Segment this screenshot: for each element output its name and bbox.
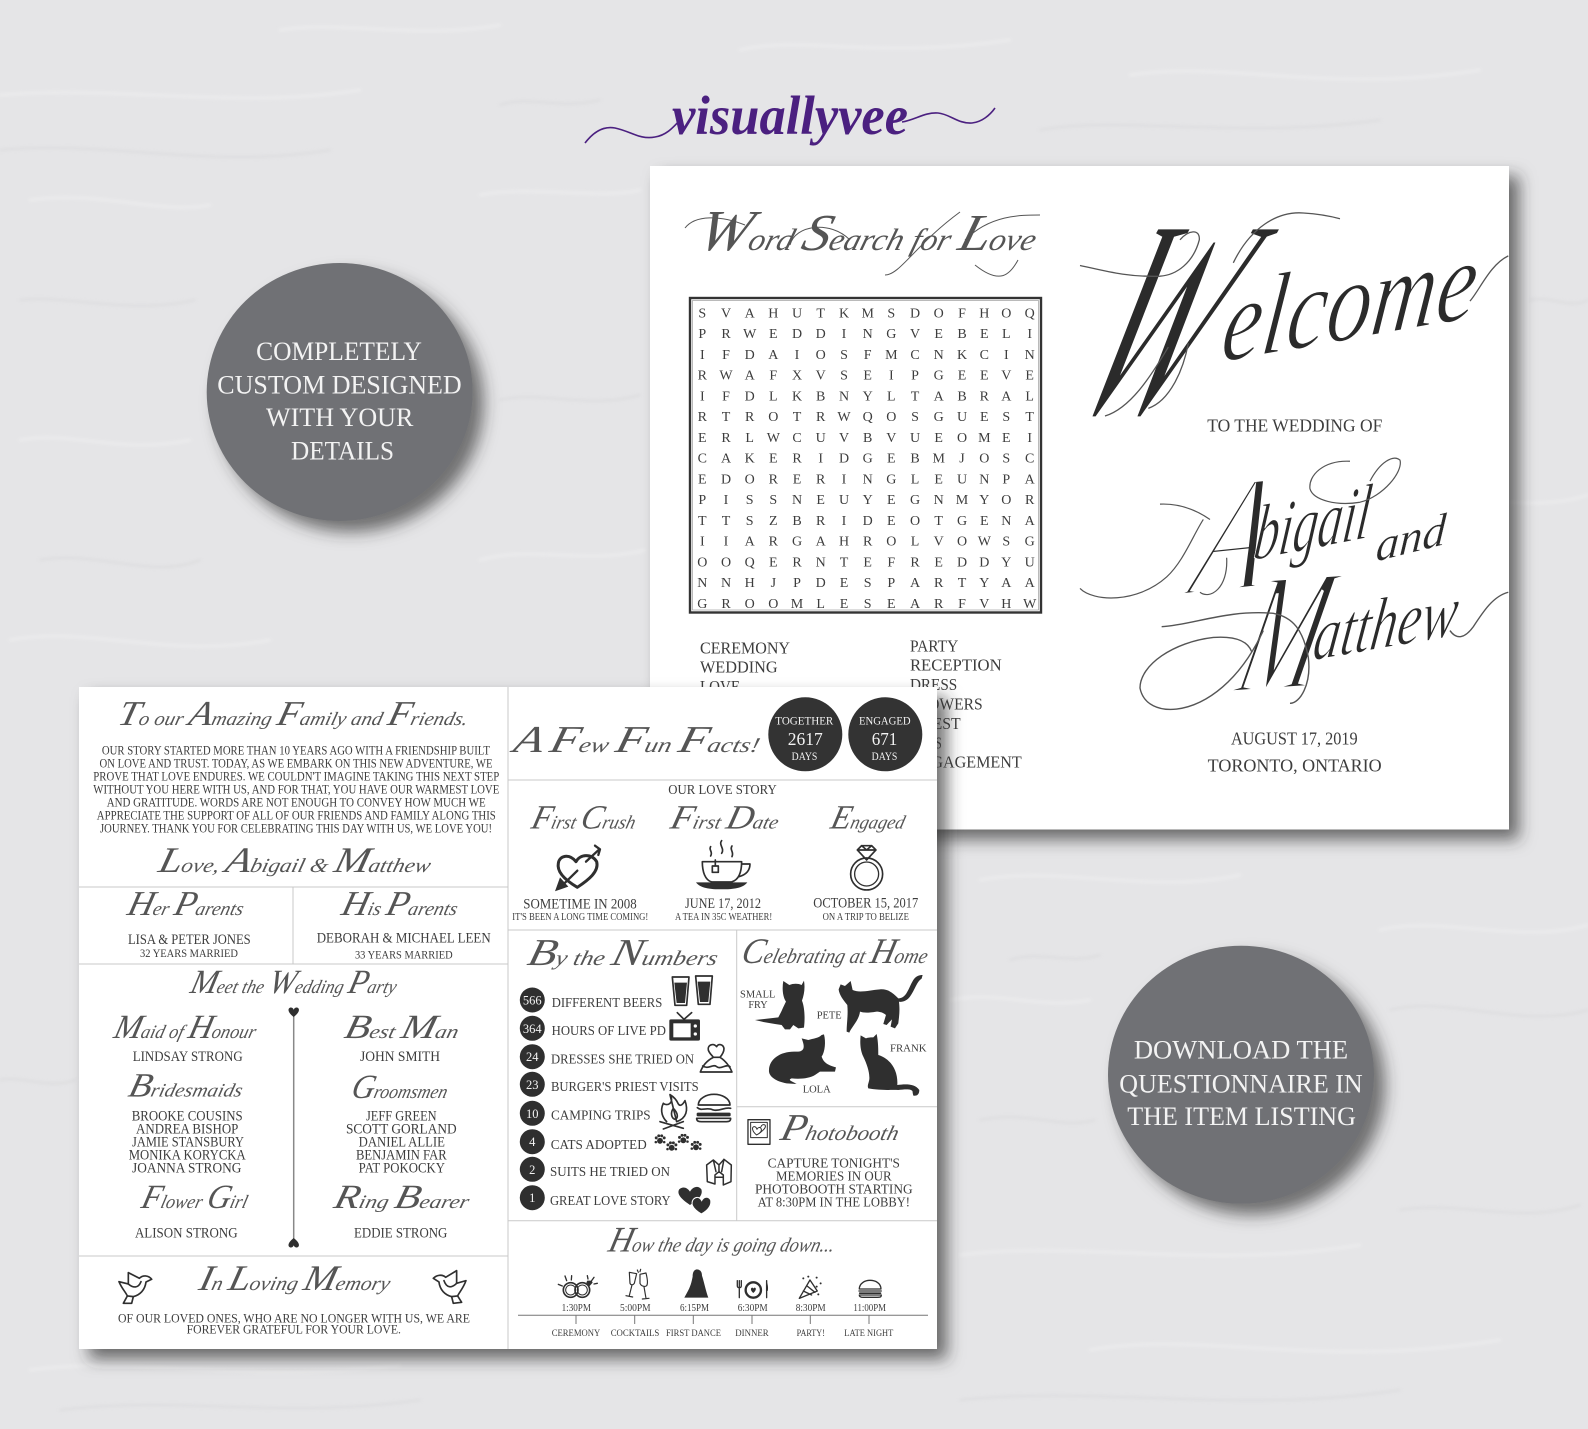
- script: matthew: [1140, 533, 1508, 731]
- cat: frank: FRANK: [890, 1042, 927, 1054]
- script: love abigail and matthew: Love, Abigail & Matthew: [154, 840, 438, 880]
- cat: frank: [860, 1034, 927, 1096]
- block: groomsmen: Groomsmen: [348, 1068, 453, 1106]
- panel: by the numbers: By the Numbers: [524, 933, 724, 974]
- block: first crush: IT'S BEEN A LONG TIME COMING!: [512, 912, 648, 923]
- row: 2 suits he tried on: 2: [529, 1163, 535, 1177]
- icon: heart with arrow: [555, 846, 600, 891]
- badge: engaged 671 days: [848, 697, 922, 771]
- panel: program back card: [79, 687, 937, 1349]
- block: first crush: [512, 799, 648, 923]
- text: to the wedding of: TO THE WEDDING OF: [1207, 416, 1383, 436]
- block: best man: Best Man: [341, 1008, 464, 1046]
- block: engaged: OCTOBER 15, 2017: [813, 896, 918, 912]
- row: 2 suits he tried on: SUITS HE TRIED ON: [550, 1164, 670, 1179]
- word search grid: RTROTRWQOSGUEST: [698, 410, 1034, 425]
- word list: GUEST: [910, 714, 961, 733]
- script: abigail: [1080, 436, 1400, 634]
- timeline labels: DINNER: [735, 1329, 769, 1339]
- block: best man: [341, 1008, 464, 1065]
- icon: dress: [700, 1045, 732, 1072]
- script: and: and: [1374, 503, 1448, 572]
- word list: CEREMONY: [700, 638, 790, 657]
- block: his parents: DEBORAH & MICHAEL LEEN: [317, 931, 491, 947]
- block: his parents: His Parents: [337, 883, 464, 923]
- block: groomsmen: DANIEL ALLIE: [359, 1135, 445, 1151]
- row: 24 dresses she tried on: 24: [526, 1050, 539, 1064]
- row: 1 great love story: 1: [529, 1191, 535, 1205]
- word list: VOWS: [908, 733, 942, 752]
- panel: photobooth: MEMORIES IN OUR: [776, 1170, 892, 1185]
- icon: campfire: [660, 1095, 687, 1129]
- cat: small fry: SMALL: [740, 989, 776, 1001]
- block: her parents: 32 YEARS MARRIED: [140, 948, 238, 960]
- word list: ENGAGEMENT: [910, 753, 1022, 772]
- block: bridesmaids: MONIKA KORYCKA: [129, 1148, 246, 1164]
- word search grid: ERLWCUVBVUEOMEI: [698, 431, 1032, 446]
- icon: first dance couple: [684, 1269, 708, 1298]
- word list: [700, 636, 1022, 772]
- timeline labels: CEREMONY: [552, 1329, 600, 1339]
- timeline labels: LATE NIGHT: [844, 1329, 893, 1339]
- row: 566 different beers: DIFFERENT BEERS: [552, 995, 662, 1010]
- panel: photobooth: PHOTOBOOTH STARTING: [755, 1182, 913, 1197]
- block: in loving memory: In Loving Memory: [194, 1258, 398, 1298]
- icon: dove right: [433, 1271, 466, 1303]
- cat: pete: PETE: [817, 1010, 842, 1022]
- panel: word search and welcome card: [650, 160, 1509, 830]
- block: groomsmen: BENJAMIN FAR: [356, 1148, 447, 1164]
- word search grid: NNHJPDESPARTYAA: [697, 576, 1036, 591]
- script: matthew: atthew: [1309, 568, 1464, 677]
- row: 566 different beers: [520, 988, 662, 1012]
- row: 10 camping trips: CAMPING TRIPS: [551, 1107, 651, 1122]
- icon: beer glasses: [672, 976, 712, 1005]
- word list: WEDDING: [700, 658, 778, 677]
- timeline times: 1:30PM: [562, 1303, 592, 1314]
- text: intro paragraph: APPRECIATE THE SUPPORT OF ALL OF OUR FRIENDS AND FAMILY ALONG THIS: [97, 809, 496, 823]
- block: maid of honour: Maid of Honour: [110, 1008, 262, 1046]
- icon: two hearts: [678, 1187, 711, 1214]
- row: 364 hours of live pd: HOURS OF LIVE PD: [552, 1023, 666, 1038]
- block: bridesmaids: JOANNA STRONG: [132, 1161, 242, 1177]
- divider with hearts: [289, 1008, 299, 1248]
- circle callout: download the questionnaire: [1108, 946, 1374, 1204]
- word search grid: PISSNEUYEGNMYOR: [698, 493, 1035, 508]
- icon: late night burger: [859, 1280, 881, 1297]
- panel: photobooth: AT 8:30PM IN THE LOBBY!: [758, 1195, 910, 1210]
- text: date and place: [1208, 728, 1382, 776]
- timeline times: 6:15PM: [680, 1303, 710, 1314]
- block: her parents: LISA & PETER JONES: [128, 932, 251, 948]
- block: in loving memory: [118, 1258, 470, 1336]
- panel: how the day is going down timeline: [518, 1219, 928, 1339]
- word list: FLOWERS: [910, 694, 983, 713]
- text: intro paragraph: ON LOVE AND TRUST. TODAY, AS WE EMBARK ON THIS NEW ADVENTURE, WE: [100, 757, 493, 771]
- row: 10 camping trips: [520, 1101, 651, 1126]
- word search grid: IFDLKBNYLTABRAL: [700, 389, 1034, 404]
- block: bridesmaids: ANDREA BISHOP: [136, 1122, 238, 1138]
- row: 23 burger's priest visits: BURGER'S PRIEST VISITS: [551, 1079, 699, 1094]
- icon: television: [669, 1013, 700, 1041]
- text: intro paragraph: WITHOUT YOU HERE WITH US, AND FOR THAT, YOU HAVE OUR WARMEST LOVE: [93, 783, 500, 797]
- word list: PARTY: [910, 636, 958, 655]
- block: engaged: ON A TRIP TO BELIZE: [823, 912, 909, 923]
- block: ring bearer: Ring Bearer: [329, 1178, 475, 1216]
- heading: a few fun facts: A Few Fun Facts!: [506, 720, 766, 761]
- icon: suit jacket: [707, 1159, 731, 1185]
- text: intro paragraph: [93, 744, 500, 836]
- timeline labels: COCKTAILS: [611, 1329, 659, 1339]
- word list: DRESS: [910, 675, 957, 694]
- cat: small fry: [740, 981, 805, 1029]
- circle callout: completely custom designed: CUSTOM DESIGNED: [217, 370, 462, 399]
- word list: LOVE: [700, 677, 740, 696]
- block: bridesmaids: Bridesmaids: [125, 1067, 248, 1105]
- block: first date: A TEA IN 35C WEATHER!: [675, 912, 772, 923]
- heading: meet the wedding party: Meet the Wedding Party: [186, 963, 403, 1001]
- cat: lola: [769, 1034, 836, 1096]
- block: ring bearer: EDDIE STRONG: [354, 1226, 448, 1242]
- badge: engaged 671 days: DAYS: [872, 751, 897, 763]
- block: flower girl: ALISON STRONG: [135, 1226, 238, 1242]
- word search grid: RWAFXVSEIPGEEVE: [698, 369, 1034, 384]
- timeline labels: FIRST DANCE: [666, 1329, 721, 1339]
- cat: small fry: FRY: [748, 999, 768, 1011]
- icon: tea cup: [696, 841, 750, 889]
- badge: together 2617 days: DAYS: [792, 751, 817, 763]
- row: 23 burger's priest visits: 23: [526, 1078, 539, 1092]
- cat: pete: [817, 975, 923, 1033]
- block: engaged: [813, 799, 918, 923]
- block: groomsmen: [346, 1068, 457, 1177]
- cat: lola: LOLA: [803, 1084, 831, 1096]
- row: 364 hours of live pd: [520, 1016, 666, 1041]
- badge: engaged 671 days: 671: [872, 729, 897, 749]
- heading: to our amazing family and friends: To our Amazing Family and Friends.: [115, 693, 474, 733]
- row: 24 dresses she tried on: [520, 1044, 694, 1069]
- panel: photobooth: CAPTURE TONIGHT'S: [768, 1157, 900, 1172]
- word search grid: OOQERNTEFREDDYU: [697, 555, 1035, 570]
- timeline times: [562, 1303, 887, 1314]
- word search grid: IFDAIOSFMCNKCIN: [700, 348, 1035, 363]
- panel: by the numbers: [520, 933, 732, 1214]
- block: his parents: 33 YEARS MARRIED: [355, 949, 453, 961]
- script: matthew: M: [1220, 533, 1356, 731]
- row: 566 different beers: 566: [523, 994, 542, 1008]
- row: 1 great love story: GREAT LOVE STORY: [550, 1193, 671, 1208]
- block: first date: First Date: [666, 799, 785, 836]
- icon: champagne flutes: [626, 1269, 649, 1299]
- script: welcome: W: [1032, 160, 1314, 476]
- block: first crush: SOMETIME IN 2008: [523, 896, 637, 912]
- block: in loving memory: FOREVER GRATEFUL FOR YOUR LOVE.: [187, 1321, 401, 1336]
- text: our love story: OUR LOVE STORY: [668, 783, 777, 798]
- word search grid: [690, 298, 1041, 612]
- icon: dinner plate: [737, 1281, 768, 1298]
- block: bridesmaids: [125, 1067, 248, 1177]
- script: abigail: bigail: [1250, 468, 1377, 578]
- icon: dove left: [119, 1273, 152, 1303]
- block: groomsmen: SCOTT GORLAND: [346, 1122, 457, 1138]
- circle callout: completely custom designed: COMPLETELY: [256, 337, 422, 366]
- logo: visuallyvee: visuallyvee: [672, 85, 908, 146]
- icon: diamond ring: [851, 846, 883, 890]
- word list: RECEPTION: [910, 656, 1002, 675]
- block: ring bearer: [329, 1178, 475, 1242]
- circle callout: completely custom designed: WITH YOUR: [266, 403, 414, 432]
- badge: together 2617 days: TOGETHER: [775, 715, 834, 727]
- block: first date: JUNE 17, 2012: [685, 896, 761, 912]
- word search grid: CAKERIDGEBMJOSC: [698, 452, 1034, 467]
- block: engaged: Engaged: [826, 799, 911, 836]
- word search grid: EDORERINGLEUNPA: [698, 472, 1036, 487]
- block: maid of honour: [110, 1008, 262, 1065]
- text: date and place: TORONTO, ONTARIO: [1208, 756, 1382, 776]
- badge: engaged 671 days: ENGAGED: [859, 715, 911, 727]
- word search grid: IIARGAHROLVOWSG: [700, 535, 1035, 550]
- logo: visuallyvee: [585, 85, 995, 146]
- row: 10 camping trips: 10: [526, 1107, 539, 1121]
- block: bridesmaids: JAMIE STANSBURY: [132, 1135, 244, 1151]
- block: first date: [666, 799, 785, 923]
- script: welcome: elcome: [1216, 214, 1486, 388]
- text: intro paragraph: JOURNEY. THANK YOU FOR CELEBRATING THIS DAY WITH US, WE LOVE YOU!: [100, 822, 492, 836]
- row: 24 dresses she tried on: DRESSES SHE TRIED ON: [551, 1051, 694, 1066]
- timeline times: 8:30PM: [796, 1303, 826, 1314]
- panel: celebrating at home: [738, 931, 934, 1096]
- word search grid: PRWEDDINGVEBELI: [698, 327, 1032, 342]
- block: best man: JOHN SMITH: [360, 1049, 440, 1065]
- text: intro paragraph: OUR STORY STARTED MORE THAN 10 YEARS AGO WITH A FRIENDSHIP BUILT: [102, 744, 490, 758]
- panel: celebrating at home: Celebrating at Home: [738, 931, 934, 971]
- timeline times: 6:30PM: [738, 1303, 768, 1314]
- block: bridesmaids: BROOKE COUSINS: [132, 1109, 243, 1125]
- row: 4 cats adopted: 4: [529, 1135, 536, 1149]
- icon: burger: [697, 1094, 731, 1122]
- text: date and place: AUGUST 17, 2019: [1231, 728, 1358, 748]
- timeline times: 5:00PM: [620, 1303, 651, 1314]
- circle callout: download the questionnaire: DOWNLOAD THE: [1134, 1035, 1348, 1064]
- icon: paw prints: [655, 1134, 702, 1151]
- timeline times: 11:00PM: [853, 1303, 887, 1314]
- panel: photobooth: [748, 1108, 913, 1210]
- block: flower girl: Flower Girl: [137, 1178, 253, 1216]
- row: 364 hours of live pd: 364: [523, 1022, 542, 1036]
- panel: how the day is going down timeline: How the day is going down...: [604, 1219, 841, 1260]
- block: first crush: First Crush: [527, 799, 641, 836]
- circle callout: completely custom designed: DETAILS: [291, 436, 394, 465]
- icon: photo frame with hearts: [748, 1120, 770, 1144]
- badge: together 2617 days: 2617: [788, 729, 823, 749]
- block: maid of honour: LINDSAY STRONG: [133, 1049, 243, 1065]
- icon: wedding rings: [558, 1276, 597, 1297]
- word search grid: GROOMLESEARFVHW: [697, 597, 1037, 612]
- block: groomsmen: PAT POKOCKY: [359, 1161, 445, 1177]
- icon: party popper: [799, 1276, 822, 1298]
- row: 4 cats adopted: CATS ADOPTED: [551, 1137, 647, 1152]
- row: 23 burger's priest visits: [520, 1072, 699, 1097]
- word search grid: TTSZBRIDEOTGENA: [698, 514, 1036, 529]
- circle callout: download the questionnaire: QUESTIONNAIRE IN: [1119, 1069, 1363, 1098]
- circle callout: completely custom designed: [207, 263, 473, 521]
- timeline labels: PARTY!: [797, 1329, 825, 1339]
- text: intro paragraph: PROVE THAT LOVE ENDURES. WE COULDN'T IMAGINE TAKING THIS NEXT STEP: [93, 770, 499, 784]
- panel: photobooth: Photobooth: [776, 1108, 905, 1149]
- badge: together 2617 days: [768, 697, 842, 771]
- block: his parents: [317, 883, 491, 961]
- block: her parents: [123, 883, 251, 960]
- row: 4 cats adopted: [520, 1129, 647, 1154]
- heading: word search for love: Word Search for Love: [691, 198, 1048, 263]
- block: in loving memory: OF OUR LOVED ONES, WHO ARE NO LONGER WITH US, WE ARE: [118, 1311, 470, 1326]
- row: 2 suits he tried on: [520, 1157, 670, 1182]
- text: intro paragraph: AND GRATITUDE. WORDS ARE NOT ENOUGH TO CONVEY HOW MUCH WE: [107, 796, 486, 810]
- timeline labels: [552, 1329, 893, 1339]
- block: flower girl: [135, 1178, 253, 1242]
- block: her parents: Her Parents: [123, 883, 250, 923]
- word search grid: SVAHUTKMSDOFHOQ: [698, 306, 1035, 321]
- circle callout: download the questionnaire: THE ITEM LISTING: [1127, 1102, 1356, 1131]
- row: 1 great love story: [520, 1185, 671, 1210]
- block: groomsmen: JEFF GREEN: [366, 1109, 437, 1125]
- script: abigail: A: [1168, 436, 1298, 634]
